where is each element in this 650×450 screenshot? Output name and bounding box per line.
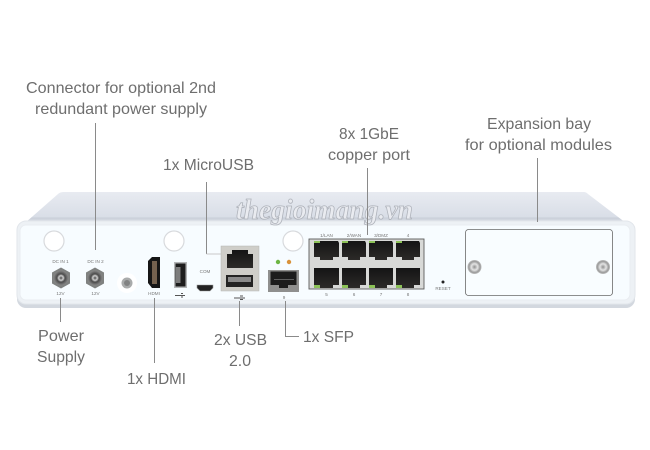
- 8-port gigabit ethernet block: 6: [353, 292, 356, 297]
- reset button: RESET: [435, 286, 451, 291]
- label: copper ports: copper port: [328, 147, 411, 164]
- top row link LEDs: [314, 241, 402, 243]
- mounting feet: [44, 231, 303, 251]
- label: expansion bay: for optional modules: [465, 137, 612, 154]
- reset button: [435, 280, 451, 291]
- label: SFP: 1x SFP: [303, 329, 354, 346]
- label: power supply: Power: [38, 328, 85, 345]
- micro USB port: [197, 269, 213, 291]
- label: expansion bay: Expansion bay: [487, 116, 591, 133]
- label: USB: 2.0: [229, 353, 251, 370]
- label: copper ports: [328, 126, 411, 235]
- label: HDMI: [127, 298, 186, 388]
- label: power supply: Supply: [37, 349, 85, 366]
- bottom row jacks: [314, 268, 420, 288]
- 8-port gigabit ethernet block: 7: [380, 292, 383, 297]
- device front panel: [17, 221, 635, 308]
- 8-port gigabit ethernet block: 5: [325, 292, 328, 297]
- 8-port gigabit ethernet block: 2/WAN: [347, 233, 361, 238]
- 8-port gigabit ethernet block: 4: [407, 233, 410, 238]
- power connector DC IN 1: DC IN 1: [52, 259, 69, 264]
- 8-port gigabit ethernet block: [309, 233, 424, 297]
- SFP port: [268, 270, 299, 300]
- status LEDs: [276, 260, 291, 264]
- label: power supply: [37, 298, 85, 366]
- 8-port gigabit ethernet block: 8: [407, 292, 410, 297]
- grounding screw: [117, 273, 137, 293]
- label: copper ports: 8x 1GbE: [339, 126, 399, 143]
- USB port: [174, 262, 187, 297]
- 8-port gigabit ethernet block: 3/DMZ: [374, 233, 388, 238]
- 8-port gigabit ethernet block: 1/LAN: [320, 233, 333, 238]
- HDMI port: [148, 257, 160, 296]
- power connector DC IN 1: [52, 259, 70, 296]
- micro USB port: COM: [200, 269, 211, 274]
- device top surface: [25, 192, 626, 223]
- top row jacks: [314, 241, 420, 260]
- RJ45 and USB combo port: [221, 246, 259, 300]
- label: MicroUSB: 1x MicroUSB: [163, 157, 254, 174]
- power connector DC IN 1: 12V: [56, 291, 66, 296]
- label: USB: [214, 301, 267, 370]
- label: redundant power supply: redundant power supply: [35, 101, 207, 118]
- HDMI port: HDMI: [148, 291, 160, 296]
- label: USB: 2x USB: [214, 332, 267, 349]
- power connector DC IN 2: 12V: [91, 291, 101, 296]
- label: HDMI: 1x HDMI: [127, 371, 186, 388]
- power connector DC IN 2: [86, 259, 104, 296]
- label: redundant power supply: Connector for optional 2nd: [26, 80, 216, 97]
- power connector DC IN 2: DC IN 2: [87, 259, 104, 264]
- SFP port: 9: [283, 295, 286, 300]
- bottom row link LEDs: [314, 285, 402, 288]
- label: expansion bay: [465, 116, 612, 222]
- watermark: thegioimang.vn: [236, 194, 413, 226]
- expansion bay: [466, 230, 612, 296]
- label: SFP: [286, 301, 354, 346]
- label: redundant power supply: [26, 80, 216, 250]
- label: MicroUSB: [163, 157, 254, 254]
